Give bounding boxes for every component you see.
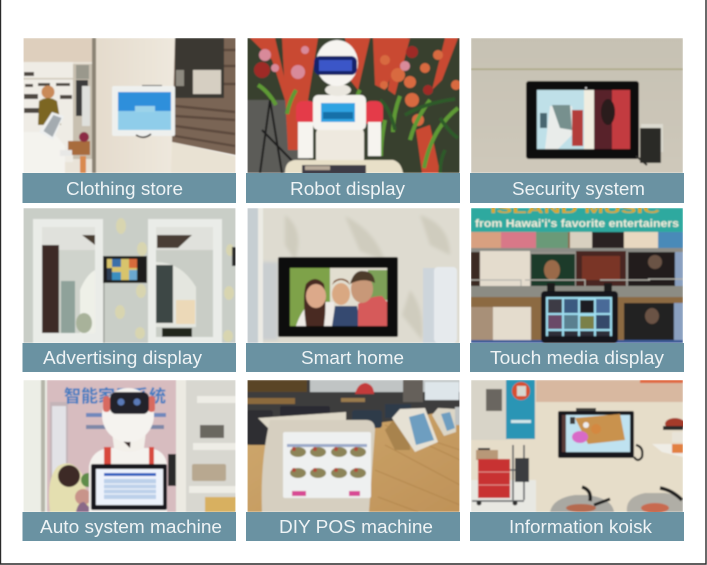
photo: touch media display (471, 201, 683, 343)
caption: clothing store: Clothing store (66, 178, 183, 199)
shopping cart with red boxes (472, 445, 529, 506)
CD row lower (471, 303, 683, 340)
icon: chest tablet (91, 464, 167, 510)
icon: shelf touch tablet (541, 283, 618, 343)
icon: wall-mounted tablet (112, 85, 175, 137)
caption: touch media display: Touch media display (490, 347, 665, 368)
panel: touch media display (470, 201, 684, 372)
mirror: left (33, 219, 103, 343)
caption: information kiosk: Information koisk (509, 516, 653, 537)
panel: information kiosk (470, 380, 685, 541)
panel: DIY POS machine (246, 380, 461, 541)
photo: security system (471, 38, 683, 173)
figure: robot (89, 388, 167, 512)
poster slogan: 智能家居系统 (64, 386, 166, 406)
figure: shop assistant (38, 86, 61, 125)
caption: advertising display: Advertising display (43, 347, 203, 368)
icon: distant POS tablets (385, 407, 461, 452)
photo: auto system machine (24, 380, 236, 512)
caption: touch media display (470, 343, 684, 372)
icon: main POS tablet (258, 412, 375, 512)
caption: robot display (246, 173, 460, 203)
photo: advertising display (24, 208, 236, 343)
photo: clothing store (24, 38, 236, 173)
icon: intercom handset (423, 267, 457, 343)
icon: power adapter box (636, 124, 663, 165)
icon: wall display with food photo (558, 408, 634, 458)
CD row upper (471, 251, 683, 287)
caption: DIY POS machine: DIY POS machine (279, 516, 433, 537)
caption: DIY POS machine (246, 512, 460, 541)
photo: robot display (248, 38, 460, 173)
panel: auto system machine (22, 380, 237, 541)
panel: clothing store (22, 38, 236, 203)
caption: smart home: Smart home (301, 347, 404, 368)
caption: auto system machine (22, 512, 236, 541)
caption: robot display: Robot display (290, 178, 406, 199)
panel: security system (470, 38, 684, 203)
store sign lettering (475, 201, 679, 230)
hanging QR poster (506, 380, 535, 439)
panel: smart home (246, 208, 460, 372)
caption: clothing store (22, 173, 236, 203)
caption: smart home (246, 343, 460, 372)
tray with magazine (285, 160, 403, 174)
cookware pots (550, 487, 683, 513)
store sign lettering: ISLAND MUSIC (490, 201, 661, 216)
wall shelf (652, 418, 685, 457)
caption: advertising display (22, 343, 236, 372)
icon: photo-frame tablet (278, 257, 398, 337)
caption: information kiosk (470, 512, 684, 541)
icon: door phone tablet (526, 81, 639, 159)
figure: child and adult (49, 463, 95, 512)
photo: smart home (248, 208, 460, 343)
icon: counter POS tablet (39, 112, 64, 140)
panel: advertising display (22, 208, 236, 372)
icon: wall display (103, 256, 147, 283)
store sign lettering: from Hawai'i's favorite entertainers (475, 218, 679, 230)
caption: security system (470, 173, 684, 203)
figure: robot (296, 40, 383, 164)
caption: security system: Security system (512, 178, 645, 199)
caption: auto system machine: Auto system machine (40, 516, 222, 537)
photo: DIY POS machine (248, 380, 460, 512)
photo: information kiosk (471, 380, 683, 512)
panel: robot display (246, 38, 461, 203)
mirror: right (148, 219, 222, 343)
